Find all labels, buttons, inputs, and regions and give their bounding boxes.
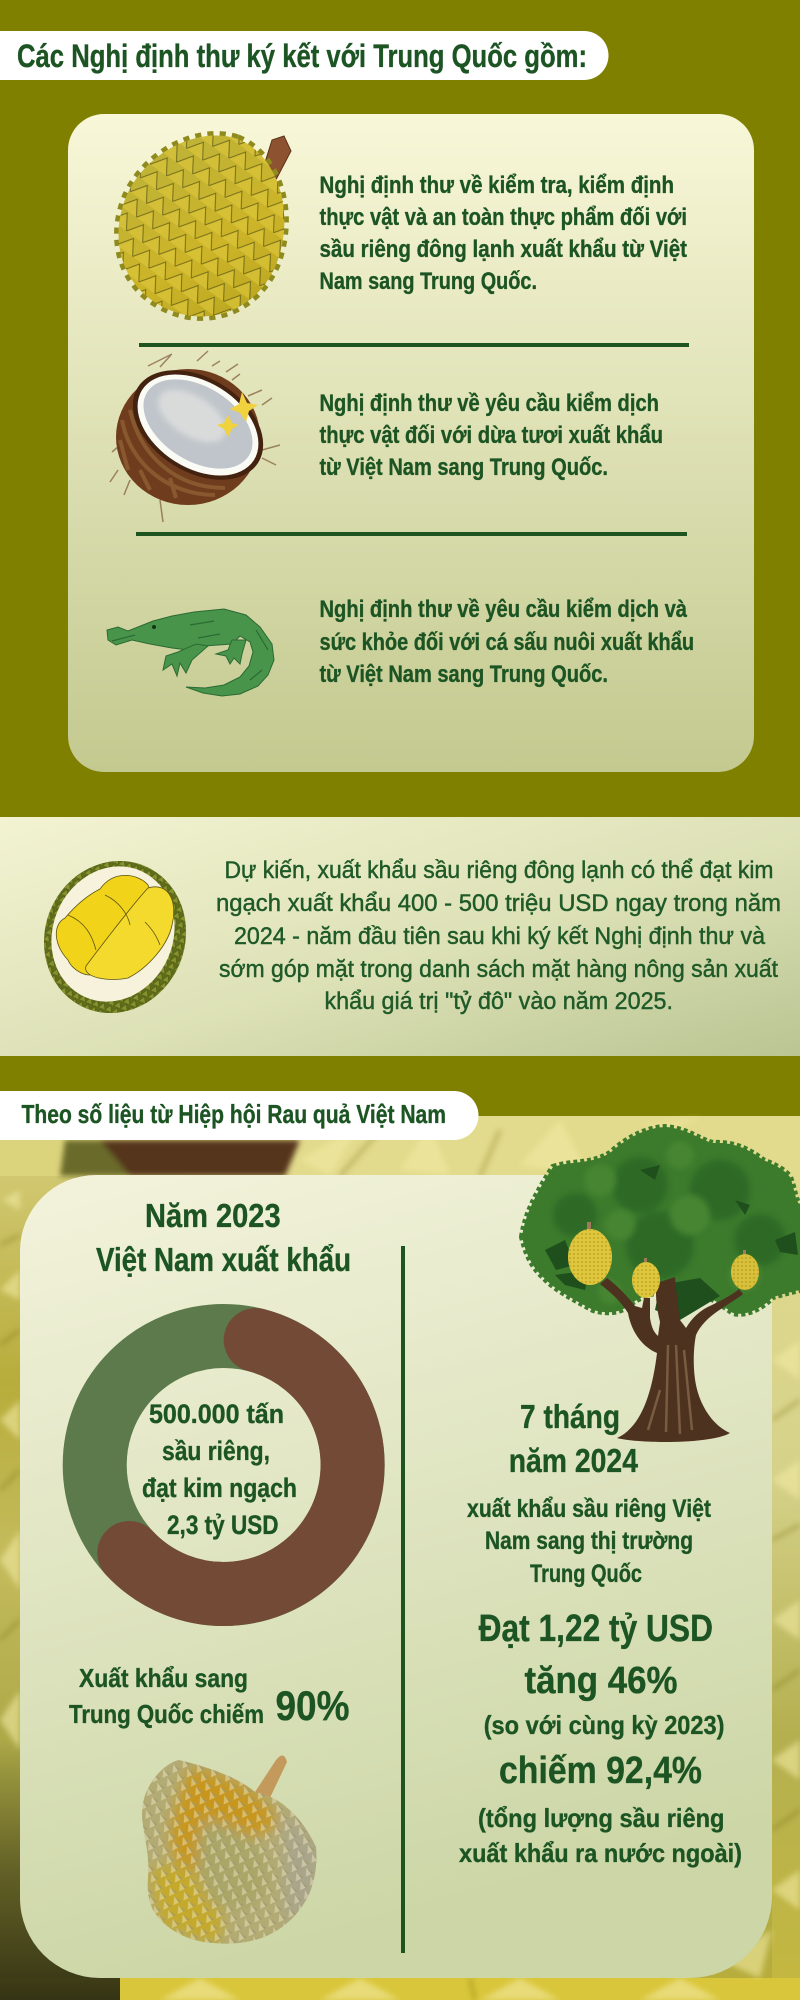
text: key figures: tăng 46% bbox=[524, 1660, 678, 1702]
text: forecast paragraph: Dự kiến, xuất khẩu sầu riêng đông lạnh có thể đạt kim bbox=[224, 857, 774, 884]
divider 1 bbox=[139, 343, 689, 347]
text: forecast paragraph: khẩu giá trị "tỷ đô" vào năm 2025. bbox=[324, 988, 673, 1015]
olive background bbox=[0, 0, 800, 1116]
vertical divider bbox=[401, 1246, 405, 1953]
text: coconut protocol: từ Việt Nam sang Trung Quốc. bbox=[320, 454, 608, 481]
text: first 7 months of 2024: năm 2024 bbox=[509, 1442, 639, 1479]
text: crocodile protocol: sức khỏe đối với cá sấu nuôi xuất khẩu bbox=[320, 629, 694, 656]
text: forecast paragraph bbox=[216, 857, 781, 1015]
text: durian protocol: thực vật và an toàn thực phẩm đối với bbox=[320, 204, 687, 231]
text: durian protocol bbox=[320, 172, 687, 295]
band: frozen durian forecast bbox=[0, 817, 800, 1056]
text: key figures: (tổng lượng sầu riêng bbox=[478, 1803, 724, 1833]
text: share to China: Trung Quốc chiếm bbox=[69, 1699, 264, 1729]
text: key figures: Đạt 1,22 tỷ USD bbox=[479, 1608, 713, 1650]
text: share to China: 90% bbox=[276, 1682, 350, 1729]
panel: export data bbox=[20, 1127, 800, 1978]
heading: year 2023: Việt Nam xuất khẩu bbox=[96, 1241, 351, 1278]
heading: source: Theo số liệu từ Hiệp hội Rau quả Việt Nam bbox=[22, 1099, 446, 1129]
text: key figures bbox=[459, 1608, 742, 1868]
background: durian skin photo bbox=[0, 1116, 800, 2000]
icon: durian bbox=[97, 112, 310, 337]
text: crocodile protocol bbox=[320, 596, 694, 688]
icon: crocodile bbox=[107, 609, 274, 696]
text: coconut protocol: Nghị định thư về yêu cầu kiểm dịch bbox=[320, 390, 659, 417]
text: durian protocol: Nam sang Trung Quốc. bbox=[320, 268, 537, 295]
donut chart bbox=[95, 1336, 353, 1594]
heading: source bbox=[0, 1091, 478, 1140]
donut chart: sầu riêng, bbox=[162, 1436, 270, 1466]
icon: durian photo bbox=[138, 1755, 320, 1947]
divider 2 bbox=[136, 532, 687, 536]
text: first 7 months of 2024: xuất khẩu sầu riêng Việt bbox=[467, 1495, 712, 1523]
text: share to China: Xuất khẩu sang bbox=[79, 1663, 248, 1693]
donut chart: đạt kim ngạch bbox=[142, 1473, 297, 1503]
text: durian protocol: Nghị định thư về kiểm tra, kiểm định bbox=[320, 172, 674, 199]
donut chart: 2,3 tỷ USD bbox=[167, 1510, 279, 1540]
icon: durian tree bbox=[522, 1127, 800, 1442]
text: first 7 months of 2024: Nam sang thị trường bbox=[485, 1527, 693, 1555]
text: coconut protocol bbox=[320, 390, 663, 481]
heading: year 2023 bbox=[96, 1197, 351, 1278]
text: forecast paragraph: 2024 - năm đầu tiên sau khi ký kết Nghị định thư và bbox=[234, 923, 766, 950]
text: share to China bbox=[69, 1663, 350, 1729]
icon: coconut bbox=[110, 348, 283, 522]
text: key figures: (so với cùng kỳ 2023) bbox=[484, 1710, 724, 1740]
panel: protocols bbox=[68, 112, 754, 772]
text: first 7 months of 2024 bbox=[467, 1398, 712, 1588]
heading: year 2023: Năm 2023 bbox=[145, 1197, 281, 1234]
text: first 7 months of 2024: Trung Quốc bbox=[530, 1560, 642, 1588]
text: forecast paragraph: ngạch xuất khẩu 400 - 500 triệu USD ngay trong năm bbox=[216, 890, 781, 917]
text: durian protocol: sầu riêng đông lạnh xuất khẩu từ Việt bbox=[320, 236, 687, 263]
text: coconut protocol: thực vật đối với dừa tươi xuất khẩu bbox=[320, 422, 663, 449]
text: crocodile protocol: Nghị định thư về yêu cầu kiểm dịch và bbox=[320, 596, 688, 623]
text: forecast paragraph: sớm góp mặt trong danh sách mặt hàng nông sản xuất bbox=[219, 956, 778, 983]
heading: protocols list bbox=[0, 31, 608, 80]
text: crocodile protocol: từ Việt Nam sang Trung Quốc. bbox=[320, 661, 608, 688]
text: first 7 months of 2024: 7 tháng bbox=[520, 1398, 620, 1435]
donut chart: 500.000 tấn bbox=[149, 1399, 284, 1429]
text: key figures: xuất khẩu ra nước ngoài) bbox=[459, 1838, 742, 1868]
icon: durian flesh bbox=[21, 839, 209, 1035]
heading: protocols list: Các Nghị định thư ký kết với Trung Quốc gồm: bbox=[17, 38, 587, 74]
text: key figures: chiếm 92,4% bbox=[499, 1750, 702, 1792]
